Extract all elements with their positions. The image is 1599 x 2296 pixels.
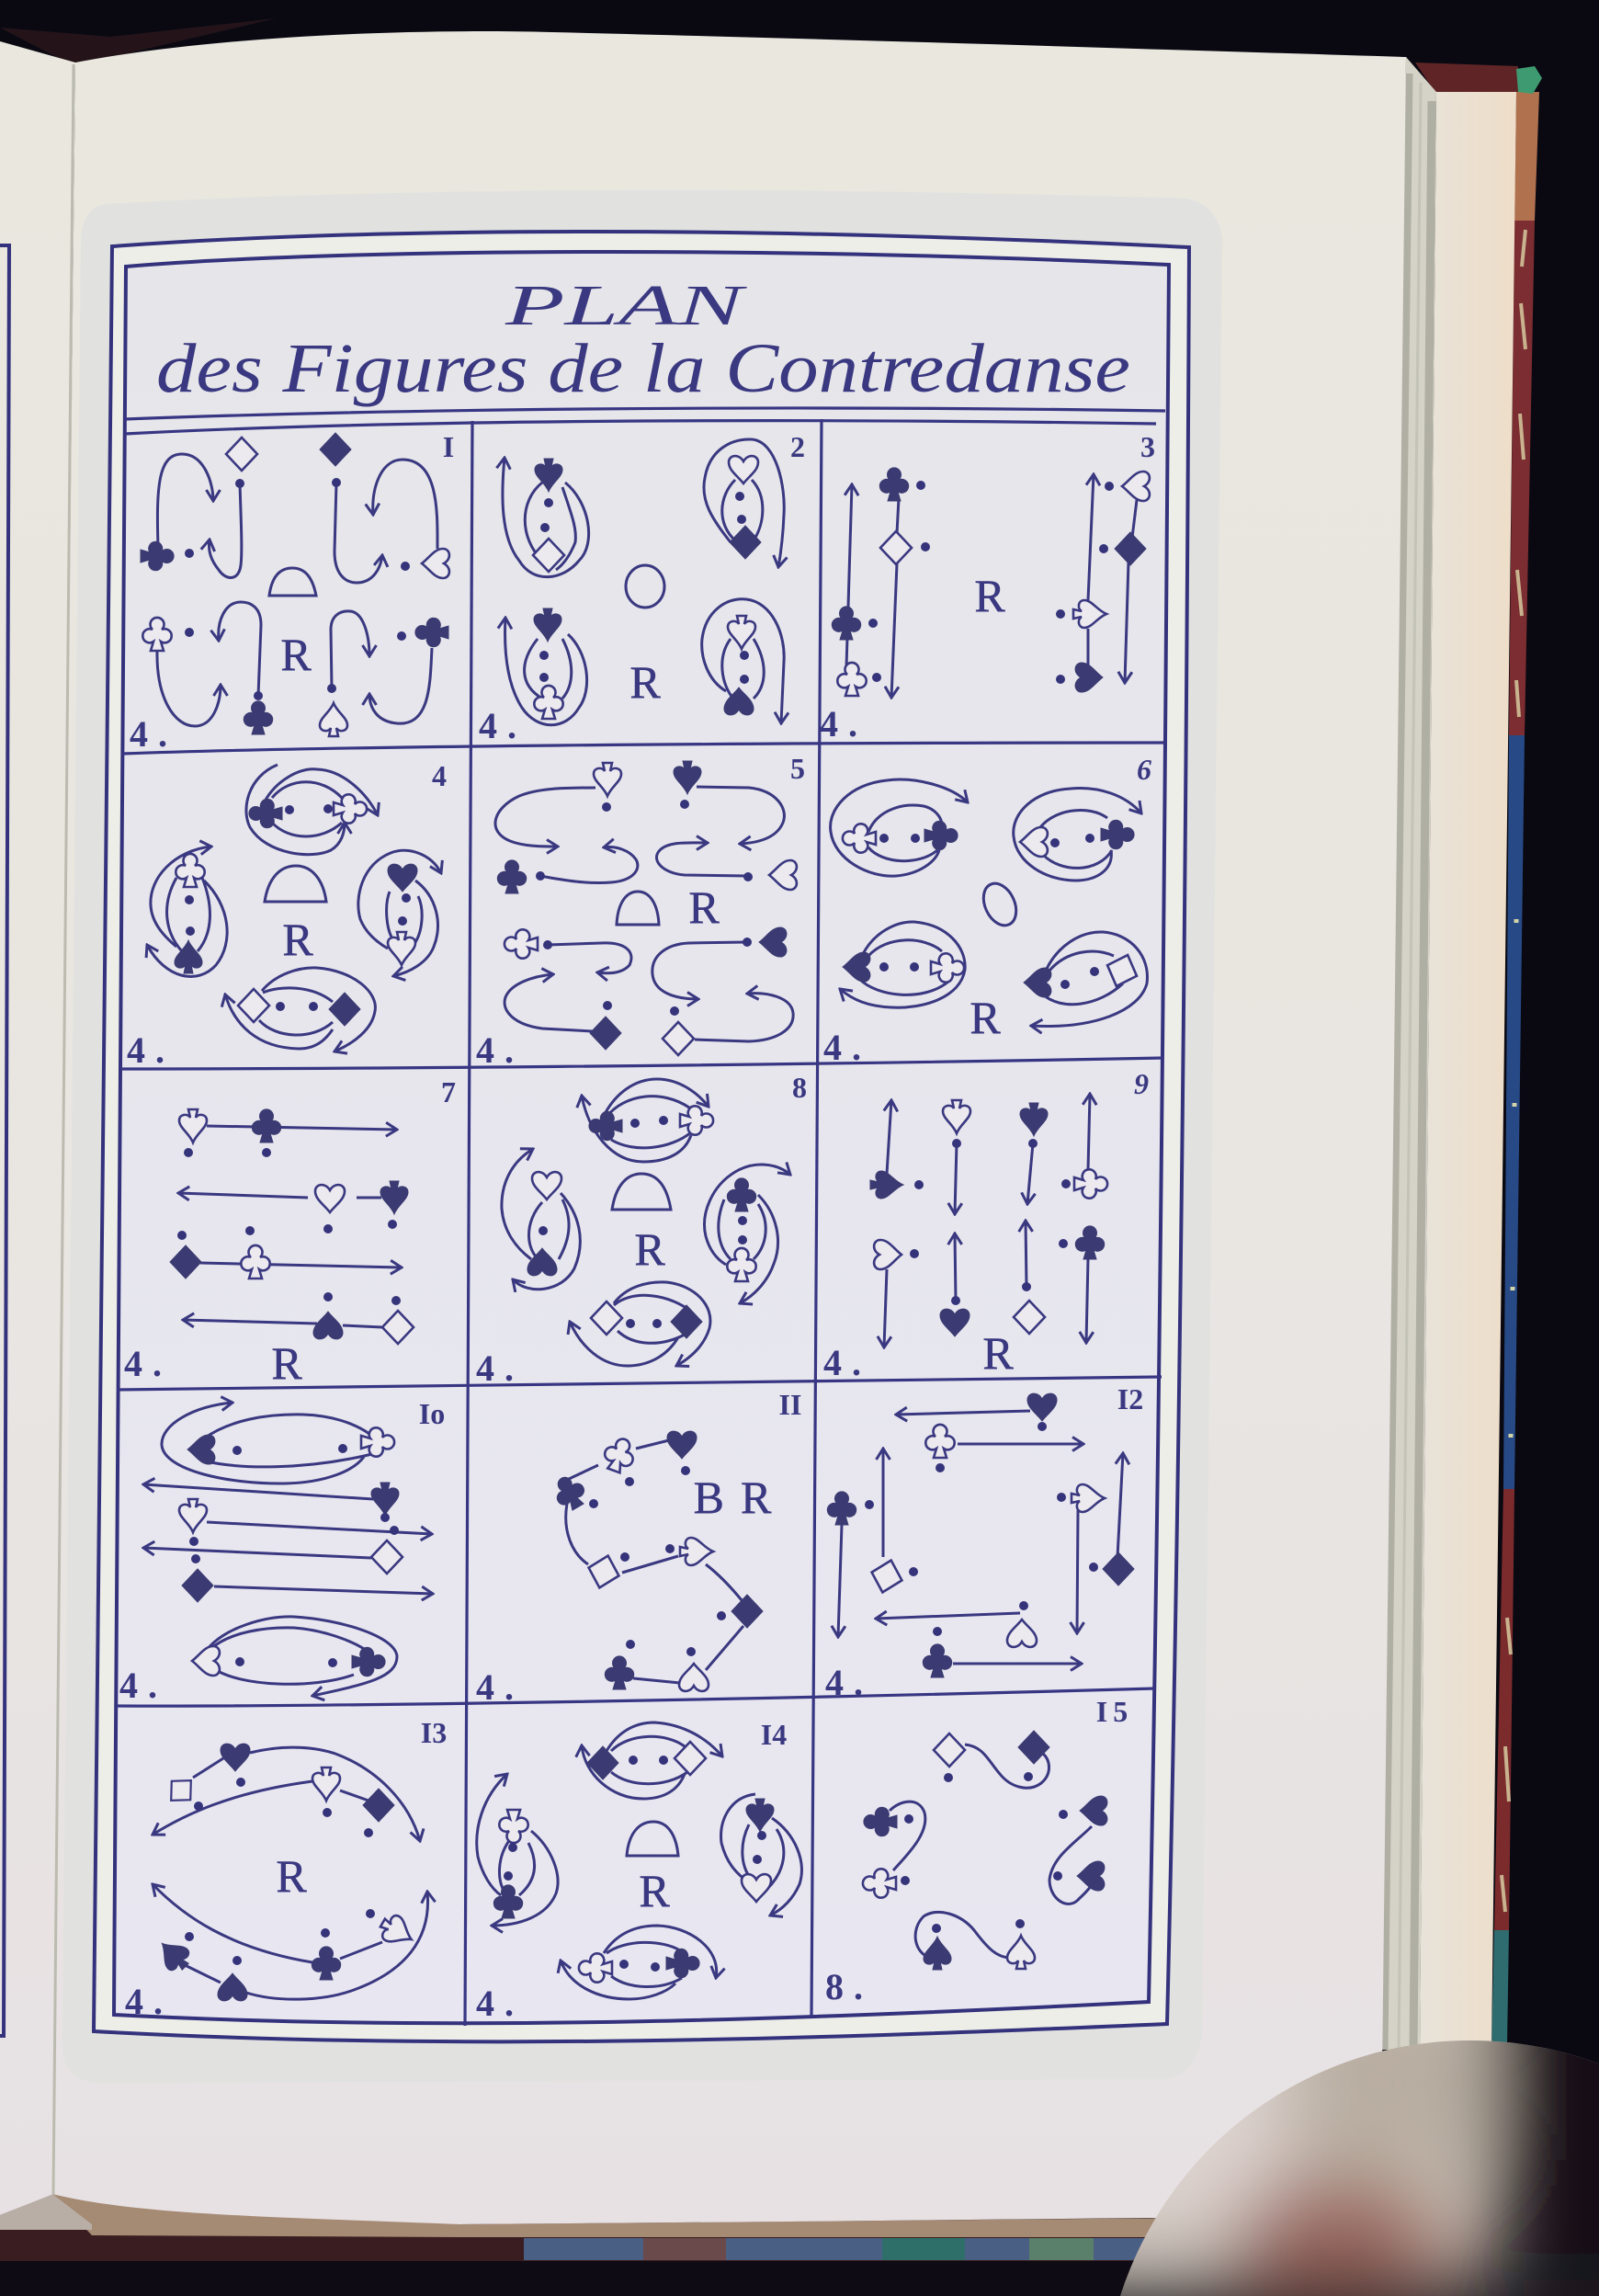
number: II [779,1388,801,1421]
plate mark [62,190,1222,2083]
count: 4. [823,1342,871,1383]
R: R [282,914,313,965]
positions [901,1772,1068,1933]
book bottom edge [0,2194,1195,2296]
panel: figure 9 [823,1067,1149,1383]
dancers [832,468,1150,696]
dark corner shadow [0,18,276,66]
arrows [502,1079,790,1366]
number: 7 [441,1075,456,1108]
arrows [846,474,1137,698]
hat sign [627,1822,678,1856]
chain line [566,1440,743,1683]
positions [185,478,410,700]
positions [185,804,411,1011]
blurred corner patch [1120,2040,1599,2296]
count: 4. [825,1662,873,1703]
panel: figure 3 [820,430,1155,744]
dancers [497,761,797,1055]
number: I5 [1096,1695,1133,1728]
panel: figure 12 [825,1382,1143,1703]
count: 4. [130,713,177,755]
arrows [831,779,1147,1027]
number: I3 [421,1716,447,1749]
panel: figure 5 [476,752,805,1071]
number: 4 [432,759,447,792]
R: R [974,570,1005,621]
arrows [477,1722,801,1999]
positions [177,1148,401,1305]
count: 4. [127,1029,175,1071]
frame margin [94,232,1189,2041]
positions [539,492,749,684]
cream fore-edge [1420,92,1516,2050]
dancers [170,1109,414,1344]
dancers [863,1731,1107,1970]
hat sign [265,866,326,902]
panel: figure 8 [476,1071,807,1389]
count: 4. [820,703,868,744]
dancers [533,456,761,719]
positions [504,1756,766,1972]
circle sign [626,565,664,608]
dancers [870,1100,1107,1336]
curves [890,1745,1092,1958]
number: I2 [1117,1382,1143,1415]
B R: BR [694,1472,788,1523]
dancers [175,794,417,1026]
positions [865,1422,1098,1636]
arrows [153,1747,428,1999]
number: 5 [790,752,805,785]
dancers [549,1431,763,1691]
count: 4. [125,1981,173,2022]
page stack lines [1384,74,1432,2050]
dancers [179,1427,403,1677]
count: 4. [476,1347,524,1389]
count: 4. [479,705,527,746]
book cover edge strip [1415,63,1542,2045]
number: 2 [790,430,805,463]
count: 4. [476,1666,524,1708]
number: 9 [1134,1067,1149,1100]
circle sign [977,878,1023,931]
positions [536,800,753,1016]
R: R [276,1850,307,1902]
panel: figure 11 [476,1388,801,1708]
arrows [157,454,437,726]
count: 4. [476,1029,524,1071]
hat sign [269,568,316,596]
count: 4. [119,1665,167,1706]
grid [116,408,1165,2026]
panel: figure 6 [823,753,1151,1068]
number: 8 [792,1071,807,1104]
double frame [94,232,1189,2041]
panel: figure 4 [127,759,447,1071]
page stack [1378,57,1436,2050]
count: 8. [825,1966,873,2007]
title: des Figures de la Contredanse [156,330,1130,407]
arrows [495,787,793,1041]
R: R [688,881,720,933]
positions [910,1139,1071,1305]
arrows [838,1411,1123,1664]
dancers [843,820,1142,997]
R: R [982,1327,1014,1379]
count: 4. [124,1343,172,1384]
arrows [884,1094,1090,1347]
number: Io [419,1397,445,1430]
count: 4. [476,1983,524,2024]
panel: figure 1 [130,430,454,755]
dancers [827,1393,1134,1677]
R: R [970,992,1001,1043]
dancers [141,433,449,736]
arrows [178,1126,402,1327]
panel: figure 2 [479,430,805,746]
arrows [143,1403,433,1696]
panel: figure 15 [825,1695,1133,2007]
arrows [503,439,784,725]
number: 3 [1140,430,1155,463]
R: R [629,656,661,708]
dancers [493,1742,774,1983]
panel: figure 14 [476,1718,801,2024]
positions [879,834,1099,989]
panel: figure 13 [125,1716,447,2022]
left page [0,41,75,2215]
positions [539,1116,747,1328]
positions [589,1466,726,1656]
number: I4 [761,1718,787,1751]
panel: figure 7 [124,1075,456,1389]
panel: figure 10 [119,1397,445,1706]
positions [185,1778,375,1965]
arrows [147,765,441,1051]
title [156,275,1130,407]
number: 6 [1137,753,1151,786]
R: R [280,629,312,680]
positions [868,481,1114,684]
number: I [443,430,454,463]
title: PLAN [504,275,748,337]
count: 4. [823,1027,871,1068]
hat sign [612,1174,671,1210]
hat sign [617,892,659,925]
frame interior [114,252,1169,2023]
R: R [271,1337,302,1389]
R: R [634,1223,665,1275]
dancers [527,1106,756,1338]
R: R [639,1865,670,1916]
left page frame fragment [0,245,9,2036]
positions [189,1444,399,1667]
gutter [53,64,74,2194]
dancers [153,1744,418,2001]
